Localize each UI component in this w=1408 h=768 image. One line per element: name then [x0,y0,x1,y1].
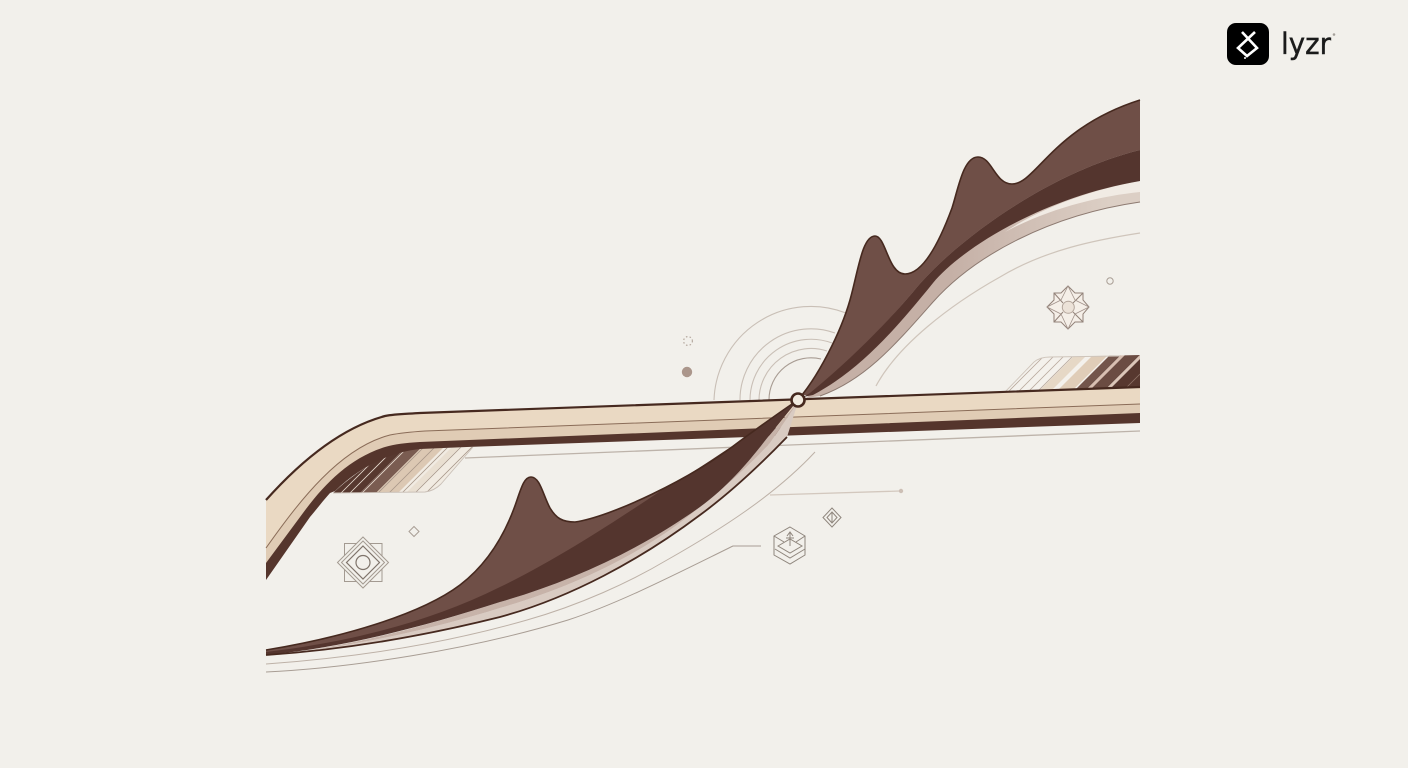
upper wave: bottom edge [820,202,1140,396]
icon: small diamond [409,526,419,536]
lower wave: top edge [266,400,798,650]
node circle [792,394,804,406]
concentric arcs [714,306,846,400]
icon: left diamond emblem [338,537,388,588]
upper wave: top edge [798,100,1140,400]
left hatched block [334,447,472,492]
upper wave: cream strip [1005,181,1140,232]
upper wave: taupe band [806,150,1140,398]
lower wave: taupe strip [280,402,798,654]
callout line with dot [770,489,903,495]
upper wave: dark band [803,150,1140,397]
lower wave: bottom edge [266,437,787,655]
icon: right star emblem [1047,286,1089,329]
lower wave: cream strip [266,402,798,656]
upper wave [798,100,1140,400]
upper wave: light body [802,100,1140,395]
lower wave: dark band [266,400,798,655]
right hatched block [1008,355,1140,391]
left hatched block outline [333,447,473,493]
decorative dots [682,278,1113,377]
icon: small diamond emblem [823,508,841,527]
logo mark [1227,23,1269,65]
right hatched block outline [1005,356,1120,392]
thin sweep lines [266,233,1140,672]
logo wordmark: lyzr [1281,27,1331,61]
lower wave [266,400,798,656]
icon: hexagon cube [774,527,805,564]
logo [1227,23,1335,65]
registered mark [1333,33,1335,36]
beige ribbon [266,387,1140,580]
lower wave: light body [266,477,667,654]
